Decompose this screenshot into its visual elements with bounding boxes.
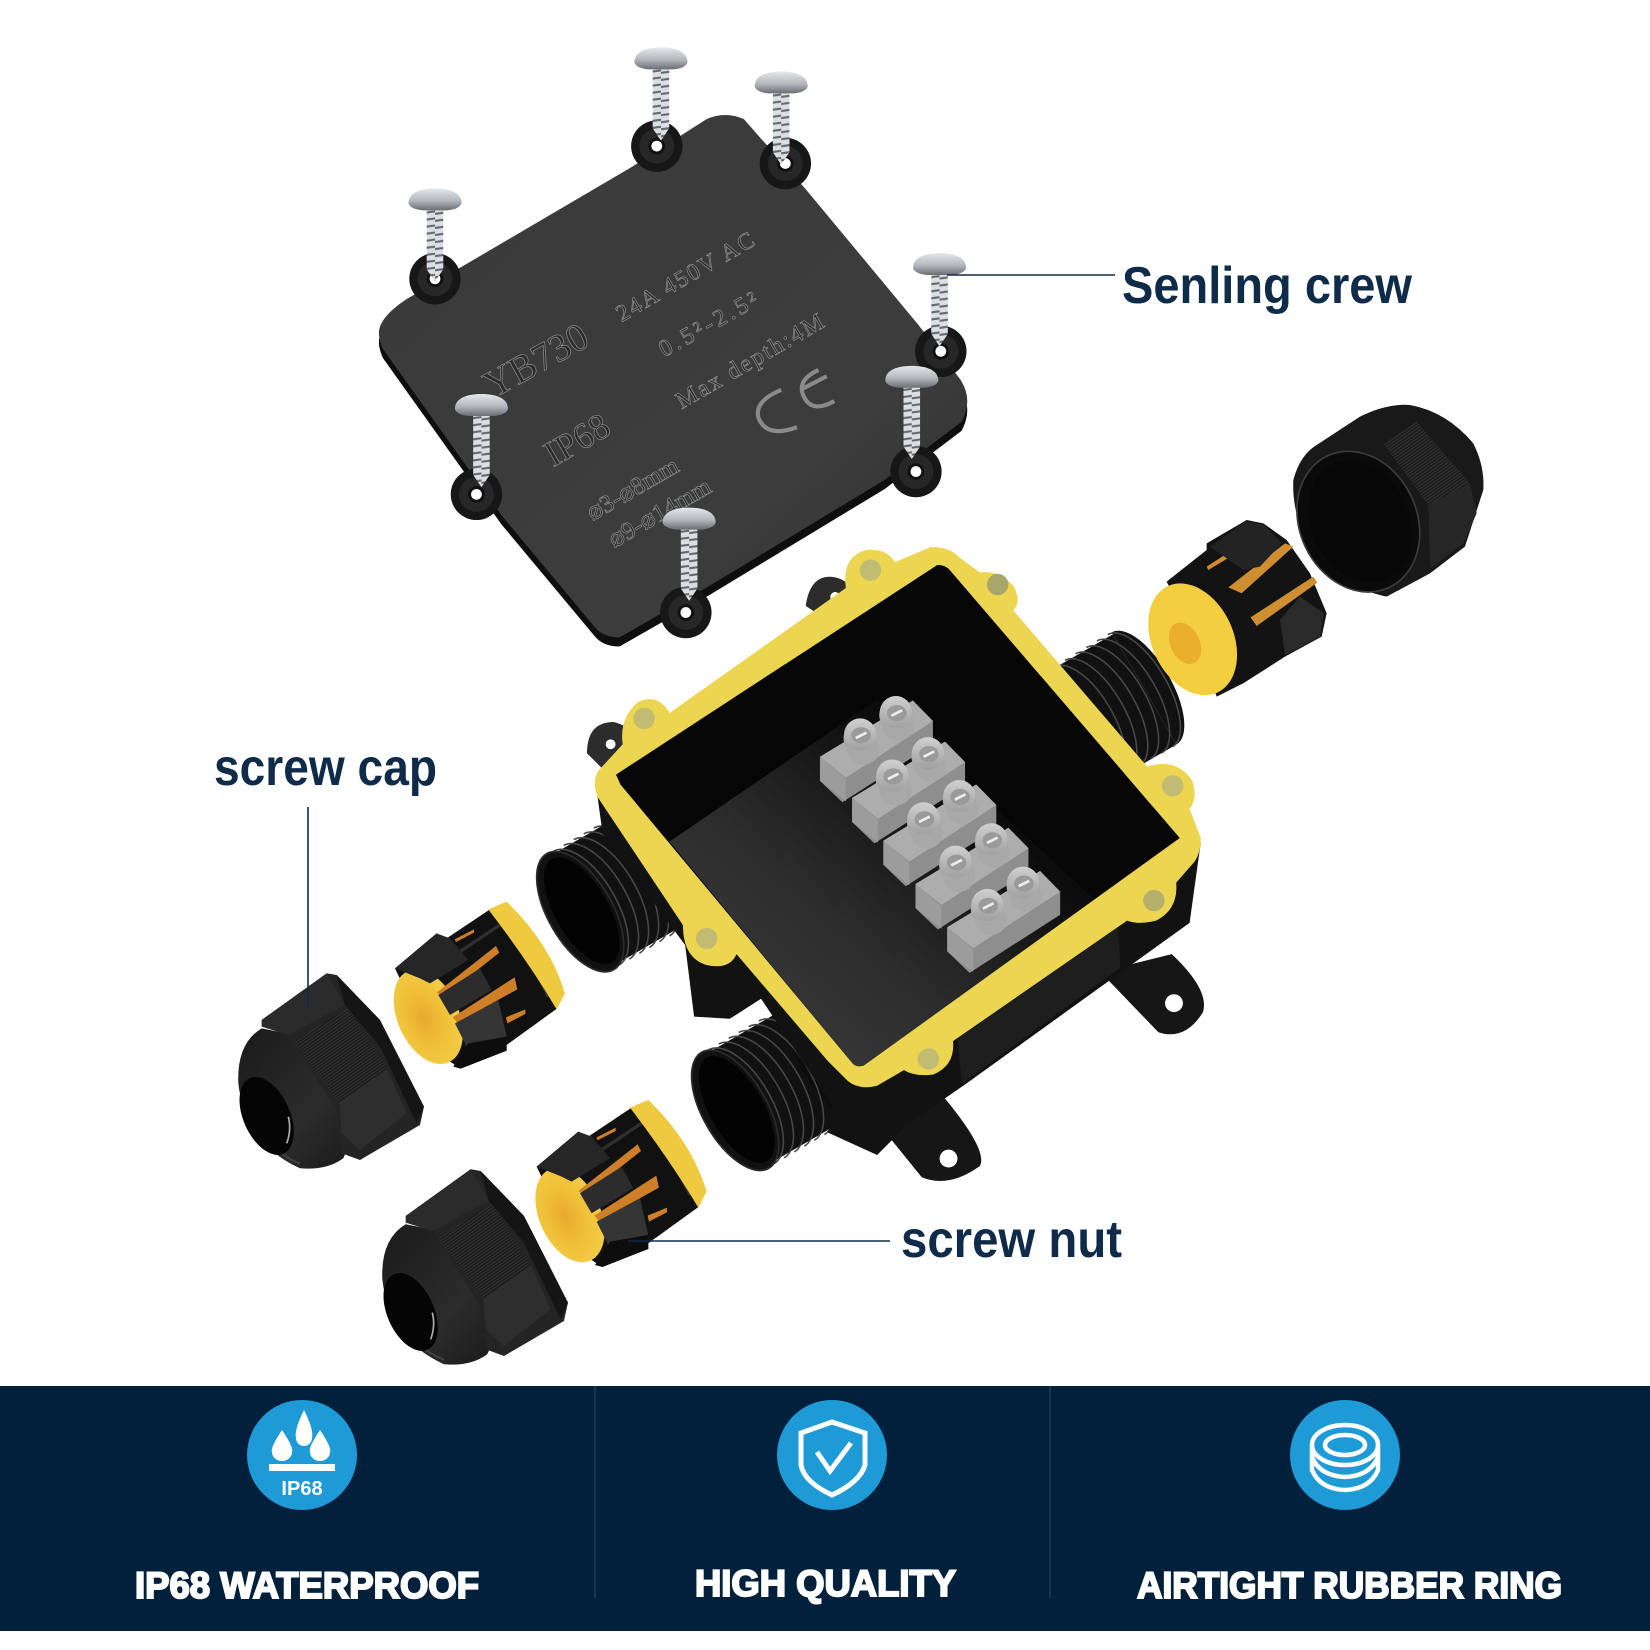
lid embossed text: Max depth:4M xyxy=(672,308,831,415)
seal plug right xyxy=(1131,520,1327,710)
threaded port right xyxy=(1011,619,1200,803)
callout: screw nut: screw nut xyxy=(901,1211,1122,1269)
callout: Senling crew: Senling crew xyxy=(1122,257,1412,315)
mounting lugs xyxy=(409,120,967,638)
threaded port bottom xyxy=(674,986,883,1184)
screws xyxy=(408,47,966,601)
mounting tabs xyxy=(587,577,1204,1181)
lid top face xyxy=(379,115,967,637)
lid embossed text: ⌀9-⌀14mm xyxy=(604,473,716,553)
cavity floor xyxy=(670,700,1096,1066)
lid embossed text: IP68 xyxy=(537,404,617,474)
lid embossed text: ⌀3-⌀8mm xyxy=(582,452,684,526)
screw cap 1 xyxy=(229,973,424,1169)
box inner cavity xyxy=(615,565,1180,1066)
screw cap right xyxy=(1274,405,1484,612)
feature banner xyxy=(0,1386,1650,1631)
lid embossed text: YB730 xyxy=(477,315,596,407)
gland right xyxy=(1131,405,1484,710)
icon: IP68 water drops: IP68 xyxy=(281,1478,323,1500)
yellow sealing ring xyxy=(595,547,1201,1087)
terminal block xyxy=(820,696,1060,973)
junction box body xyxy=(519,547,1204,1184)
junction box lid with screws xyxy=(379,47,967,647)
heading: airtight rubber ring: AIRTIGHT RUBBER RING xyxy=(1137,1565,1562,1606)
seal plug 2 xyxy=(522,1100,707,1273)
box outer wall xyxy=(596,664,1201,1155)
lid embossed text: 24A 450V AC xyxy=(612,226,761,327)
heading: high quality: HIGH QUALITY xyxy=(695,1563,956,1604)
icon: rubber ring xyxy=(1290,1400,1400,1510)
icon: IP68 water drops xyxy=(247,1400,357,1510)
seal plug 1 xyxy=(380,902,565,1075)
CE mark xyxy=(758,370,834,431)
lid embossed text xyxy=(477,226,831,553)
heading: IP68 waterproof: IP68 WATERPROOF xyxy=(135,1565,479,1606)
icon: shield check xyxy=(777,1400,887,1510)
threaded port left xyxy=(519,788,728,986)
callout: screw cap: screw cap xyxy=(214,739,437,797)
screw cap 2 xyxy=(373,1169,568,1365)
glands left xyxy=(229,902,707,1365)
lid side edge xyxy=(379,124,967,647)
lid screw posts on ring xyxy=(633,559,1183,1070)
lid embossed text: 0.5²-2.5² xyxy=(655,286,765,363)
